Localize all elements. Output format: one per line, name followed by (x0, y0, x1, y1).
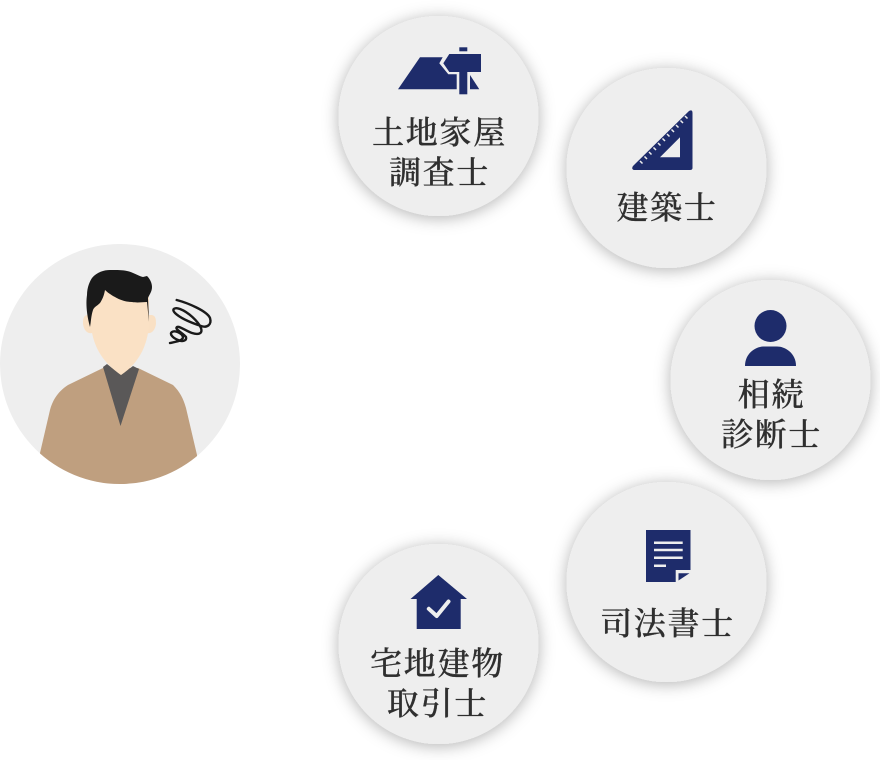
label (721, 376, 822, 452)
person illustration: worried man (0, 244, 240, 490)
icon: person (745, 310, 796, 366)
jacket (40, 368, 197, 490)
icon: land and signpost (398, 47, 481, 94)
panel: inheritance adviser (670, 280, 870, 480)
label (372, 114, 507, 190)
label: 建築士 (616, 190, 718, 226)
label: 宅地建物 (370, 646, 505, 682)
panel: land surveyor (338, 16, 538, 216)
worry squiggle (170, 300, 210, 343)
panel: architect (566, 68, 766, 268)
icon: document (646, 530, 690, 582)
label: 相続 (738, 376, 805, 412)
hair (86, 270, 152, 327)
icon: house with check (410, 575, 467, 629)
shirt collar (103, 364, 139, 426)
panel: judicial scrivener (566, 482, 766, 682)
face (92, 290, 149, 375)
icon: set square (632, 110, 692, 170)
ears (83, 315, 156, 333)
label: 診断士 (721, 416, 822, 452)
label: 司法書士 (600, 606, 735, 642)
panel: real estate agent (338, 544, 538, 744)
label: 調査士 (389, 154, 490, 190)
label (370, 646, 505, 722)
label: 土地家屋 (372, 114, 507, 150)
label: 取引士 (387, 686, 488, 722)
